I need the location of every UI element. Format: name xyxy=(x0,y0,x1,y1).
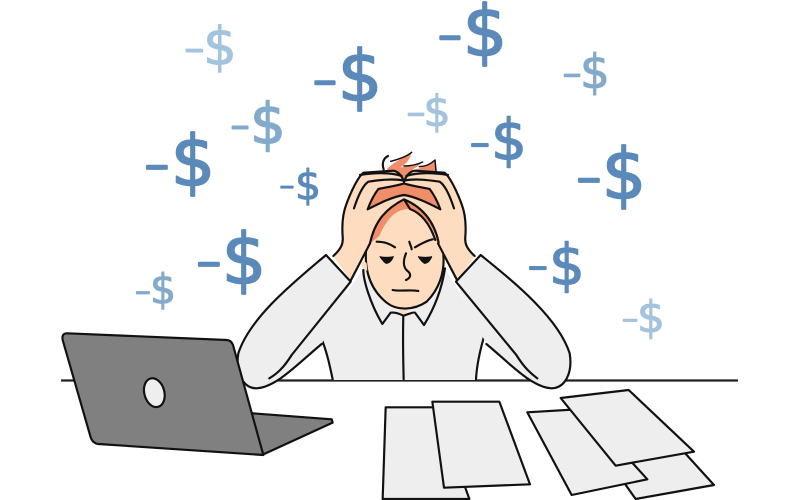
laptop screen xyxy=(62,333,263,455)
left hand xyxy=(333,171,404,281)
negative dollar 4: − xyxy=(562,61,582,89)
hair band between hands xyxy=(368,183,440,209)
collar xyxy=(363,268,445,325)
negative dollar 4: $ xyxy=(580,45,610,100)
negative dollar 12: $ xyxy=(150,265,176,313)
negative dollar 1: − xyxy=(184,36,205,64)
shirt body xyxy=(319,268,485,380)
laptop xyxy=(62,333,333,455)
negative dollar 5: $ xyxy=(423,87,451,137)
negative dollar 8: $ xyxy=(295,161,321,209)
papers xyxy=(383,390,714,499)
negative dollar 7: − xyxy=(144,149,170,185)
negative dollar 2: − xyxy=(312,65,338,100)
negative dollar 5: − xyxy=(406,100,426,128)
negative dollar 13: − xyxy=(528,253,548,282)
negative dollar 8: − xyxy=(279,176,295,198)
negative dollar 11: $ xyxy=(222,218,266,300)
ear xyxy=(361,262,367,271)
negative dollar 12: − xyxy=(135,280,151,304)
paper right top xyxy=(561,390,694,466)
laptop base xyxy=(248,413,333,454)
negative dollar 6: $ xyxy=(250,92,286,157)
face features xyxy=(377,239,433,291)
negative dollar 3: − xyxy=(437,20,463,55)
left arm sleeve xyxy=(238,255,351,388)
negative dollar 1: $ xyxy=(203,16,237,78)
person xyxy=(238,152,570,388)
negative dollar 11: − xyxy=(196,246,222,282)
right arm sleeve xyxy=(456,255,570,388)
negative dollar 9: − xyxy=(470,130,490,159)
hair over forehead xyxy=(370,199,439,243)
right hand xyxy=(404,171,475,281)
laptop logo xyxy=(141,376,168,409)
negative dollar 10: $ xyxy=(602,134,646,216)
paper right middle xyxy=(527,409,647,495)
hair tufts xyxy=(383,152,436,178)
negative dollar 14: $ xyxy=(637,292,665,343)
negative dollar 13: $ xyxy=(549,233,585,298)
shirt placket xyxy=(400,315,407,379)
negative dollar 14: − xyxy=(621,308,639,332)
neck and face xyxy=(366,197,444,309)
table edge xyxy=(61,379,738,382)
symbols: negative dollar signs xyxy=(135,0,665,343)
negative dollar 2: $ xyxy=(338,36,382,118)
paper left back xyxy=(383,407,469,499)
negative dollar 10: − xyxy=(576,162,602,198)
paper left front xyxy=(432,402,530,488)
paper right bottom xyxy=(603,437,714,499)
negative dollar 6: − xyxy=(230,113,250,141)
negative dollar 7: $ xyxy=(171,120,215,202)
negative dollar 9: $ xyxy=(491,108,527,173)
